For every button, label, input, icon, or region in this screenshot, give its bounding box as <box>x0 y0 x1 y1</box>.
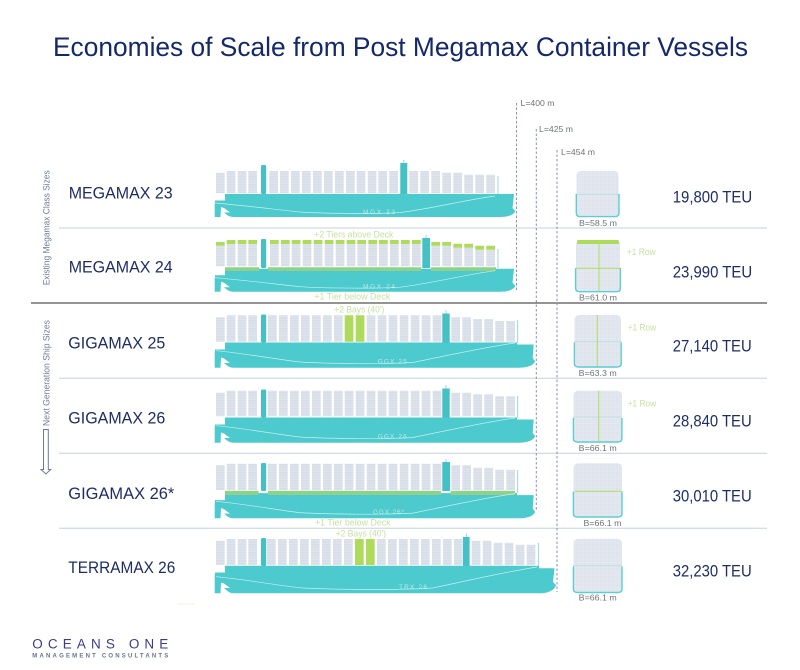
length marker: 425 m: L=425 m <box>539 124 573 134</box>
ship profile <box>215 534 556 593</box>
side label: existing class sizes: Existing Megamax Class Sizes <box>42 170 52 285</box>
midship section: B=66.1 m <box>579 443 617 453</box>
capacity: 19,800 TEU <box>673 189 752 207</box>
annotation: one row: +1 Row <box>627 247 656 258</box>
ship profile: GGX 26* <box>373 509 404 516</box>
ship profile <box>215 160 515 217</box>
ship name: GIGAMAX 26* <box>68 484 175 503</box>
annotation: two bays: +2 Bays (40') <box>334 304 384 315</box>
ship profile: MGX 24 <box>363 284 395 291</box>
midship section <box>573 463 622 528</box>
ship profile <box>215 235 515 292</box>
midship section <box>573 391 622 453</box>
midship section <box>576 240 620 303</box>
annotation: tier below deck: +1 Tier below Deck <box>315 518 391 529</box>
side label: next generation: Next Generation Ship Sizes <box>42 320 52 426</box>
title: Economies of Scale from Post Megamax Container Vessels <box>53 32 748 62</box>
ship profile <box>215 310 535 368</box>
annotation: one row: +1 Row <box>628 399 656 410</box>
logo: Oceans One: MANAGEMENT CONSULTANTS <box>32 654 168 660</box>
midship section <box>574 315 622 378</box>
ship name: MEGAMAX 24 <box>69 258 173 277</box>
capacity: 28,840 TEU <box>673 413 752 431</box>
row: Gigamax 26 <box>68 385 752 453</box>
capacity: 23,990 TEU <box>673 263 752 281</box>
row: Megamax 24 <box>69 229 752 303</box>
ship name: GIGAMAX 25 <box>68 333 165 352</box>
row: Terramax 26 <box>68 529 752 603</box>
midship section <box>573 539 622 603</box>
ship profile: GGX 26 <box>378 433 407 440</box>
midship section <box>576 171 619 228</box>
midship section: B=66.1 m <box>579 593 617 603</box>
ship name: GIGAMAX 26 <box>68 408 165 427</box>
midship section: B=58.5 m <box>579 218 617 228</box>
annotation: two bays: +2 Bays (40') <box>336 529 386 540</box>
ship name: MEGAMAX 23 <box>69 183 173 202</box>
length marker: 400 m: L=400 m <box>520 98 554 108</box>
logo: Oceans One: OCEANS ONE <box>32 636 168 651</box>
row: Megamax 23 <box>69 160 752 228</box>
annotation: tiers above deck: +2 Tiers above Deck <box>314 229 394 240</box>
midship section: B=61.0 m <box>579 293 617 303</box>
length marker: 454 m: L=454 m <box>561 147 595 157</box>
capacity: 32,230 TEU <box>673 563 752 581</box>
midship section: B=63.3 m <box>579 368 617 378</box>
capacity: 30,010 TEU <box>673 488 752 506</box>
ship profile: GGX 25 <box>378 358 407 365</box>
midship section: B=66.1 m <box>584 518 622 528</box>
row: Gigamax 25 <box>68 304 752 378</box>
annotation: one row: +1 Row <box>628 323 656 334</box>
ship profile: TRX 26 <box>399 584 427 591</box>
ship profile <box>215 385 535 443</box>
capacity: 27,140 TEU <box>673 338 752 356</box>
logo: Oceans One <box>32 636 168 660</box>
ship profile: MGX 23 <box>363 209 395 216</box>
annotation: tier below deck: +1 Tier below Deck <box>314 292 391 303</box>
ship profile <box>215 459 535 518</box>
ship name: TERRAMAX 26 <box>68 558 175 577</box>
arrow: next generation downward <box>41 430 51 474</box>
row: Gigamax 26* <box>68 459 752 529</box>
